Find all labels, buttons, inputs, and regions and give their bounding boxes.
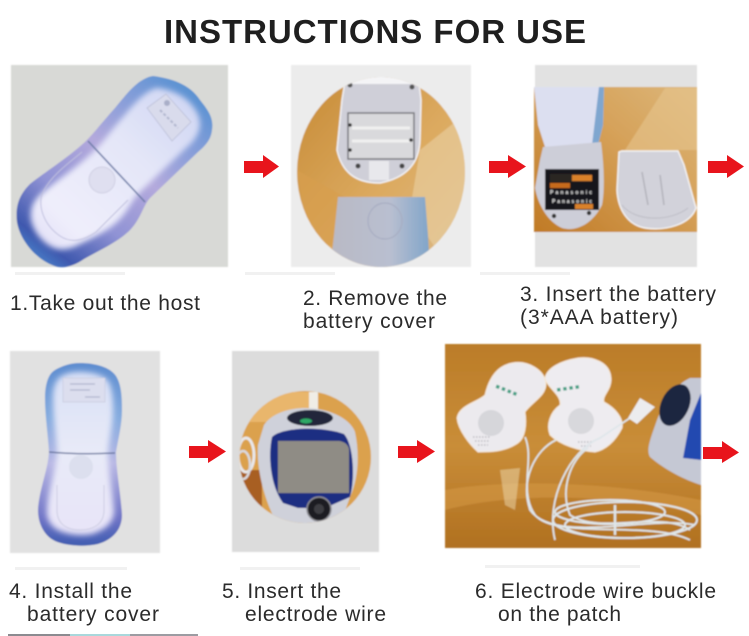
wood highlights	[412, 124, 465, 245]
label: step 3	[520, 283, 716, 329]
label: step 5: electrode wire	[245, 603, 386, 626]
label: step 2: battery cover	[303, 310, 435, 333]
panel: step 3 photo, batteries fitted	[534, 65, 697, 267]
device body, rotated	[17, 76, 212, 267]
label: step 6: 6. Electrode wire buckle	[475, 580, 716, 603]
plug	[628, 398, 655, 424]
left patch	[457, 362, 546, 452]
title: INSTRUCTIONS FOR USE	[164, 13, 586, 50]
arrow 3	[708, 155, 744, 178]
blue bezel	[270, 429, 353, 508]
device corner	[648, 378, 701, 485]
removed cover	[330, 197, 430, 270]
panel: step 6 photo, electrode patches	[445, 344, 701, 548]
round latch	[89, 167, 115, 193]
arrow 2	[489, 155, 526, 178]
label: step 3: 3. Insert the battery	[520, 283, 716, 306]
label: step 6	[475, 580, 716, 626]
label: step 6: on the patch	[498, 603, 621, 626]
device face	[31, 88, 200, 249]
seam line	[88, 141, 145, 202]
arrow 5	[398, 440, 435, 463]
round latch	[69, 455, 93, 479]
arrow 1	[244, 155, 279, 178]
panel: step 4 photo, cover reinstalled	[10, 351, 160, 553]
label: step 2	[303, 287, 447, 333]
seam line	[49, 452, 115, 454]
device face	[47, 372, 114, 535]
label: step 2: 2. Remove the	[303, 287, 447, 310]
label plate	[63, 378, 105, 402]
panel: step 1 photo of the device back	[11, 65, 228, 267]
label: step 4: battery cover	[27, 603, 159, 626]
panel: step 3 photo, batteries fitted: Panasonic	[552, 199, 592, 205]
arrow 6	[703, 441, 739, 463]
cover outline	[57, 485, 104, 530]
dial	[287, 410, 333, 426]
right patch	[545, 358, 622, 452]
panel: step 5 photo, electrode socket	[232, 351, 379, 552]
socket	[307, 497, 331, 521]
screen	[278, 441, 349, 493]
removed cover	[617, 151, 696, 229]
label plate	[147, 94, 191, 141]
wires	[525, 418, 697, 540]
panel: step 6 photo, electrode patches: ■ ■ ■ ■	[556, 384, 580, 394]
arrow 4	[189, 440, 226, 463]
label: step 5: 5. Insert the	[222, 580, 341, 603]
label: step 5	[222, 580, 386, 626]
device upper half	[534, 87, 604, 147]
panel: step 6 photo, electrode patches: ■ ■ ■ ■	[494, 383, 518, 398]
panel: step 2 photo, cover removed	[291, 65, 471, 270]
battery compartment half	[535, 142, 604, 229]
battery compartment body	[337, 76, 421, 183]
cropped strip at bottom edge	[8, 634, 198, 636]
faint ghost captions under panels	[15, 272, 640, 570]
battery bay	[348, 113, 414, 159]
label: step 1: 1.Take out the host	[10, 292, 200, 315]
panel: step 3 photo, batteries fitted: Panasonic	[550, 190, 592, 196]
device body	[258, 408, 358, 525]
coiled wire	[238, 438, 254, 472]
battery cover outline	[41, 152, 128, 240]
label: step 4: 4. Install the	[9, 580, 132, 603]
label: step 4	[9, 580, 159, 626]
label: step 3: (3*AAA battery)	[520, 306, 678, 329]
